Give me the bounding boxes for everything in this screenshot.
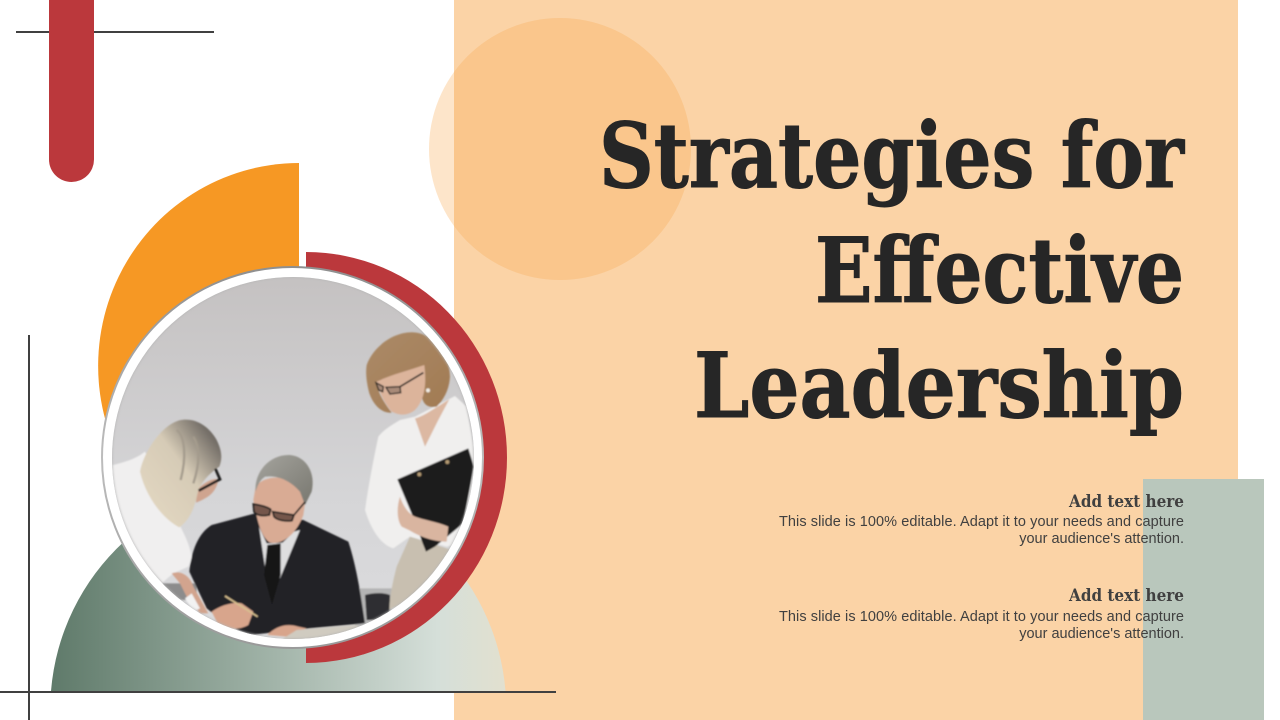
left woman's shirt xyxy=(103,452,192,585)
sage green rectangle xyxy=(1143,479,1264,720)
text block 1 xyxy=(779,492,1184,547)
text block 1: Add text here xyxy=(1068,492,1184,512)
man's glasses xyxy=(253,502,305,521)
text block 2: Add text here xyxy=(1068,586,1184,606)
left woman's hair xyxy=(140,420,221,527)
left woman's paper xyxy=(185,593,200,612)
right woman's earring xyxy=(426,388,430,392)
right woman's hand xyxy=(398,497,448,542)
red rounded bar xyxy=(49,0,94,182)
text block 2: your audience's attention. xyxy=(1019,626,1184,642)
man's hands and pen xyxy=(212,603,253,629)
text block 1: This slide is 100% editable. Adapt it to your needs and capture xyxy=(779,514,1184,530)
photo frame xyxy=(102,267,483,648)
thin line top left xyxy=(16,31,214,33)
thin vertical line xyxy=(28,335,30,720)
left woman's glasses xyxy=(199,469,220,491)
man's suit xyxy=(189,513,365,635)
right woman's face xyxy=(377,365,425,415)
photo inner shadow xyxy=(111,276,475,640)
man's shirt xyxy=(259,527,300,578)
translucent orange circle xyxy=(429,18,691,280)
man's hair xyxy=(256,455,313,505)
text block 2 xyxy=(779,586,1184,642)
orange semicircle xyxy=(98,163,299,490)
title xyxy=(599,103,1185,439)
title: Strategies for xyxy=(599,103,1185,209)
gradient green dome xyxy=(51,481,506,691)
man's tie xyxy=(264,543,281,605)
right woman's glasses xyxy=(376,373,423,394)
thin horizontal baseline xyxy=(0,691,556,693)
sofa and desk xyxy=(355,588,392,627)
left woman's face xyxy=(196,479,218,503)
peach background panel xyxy=(454,0,1238,720)
right woman's clipboard xyxy=(397,448,474,552)
right woman's skirt xyxy=(389,537,452,609)
text block 2: This slide is 100% editable. Adapt it to your needs and capture xyxy=(779,609,1184,625)
right woman's neck xyxy=(415,399,449,447)
title: Leadership xyxy=(694,333,1184,439)
text block 1: your audience's attention. xyxy=(1019,531,1184,547)
left woman's arm and hand xyxy=(172,572,208,613)
title: Effective xyxy=(815,218,1184,324)
red half ring xyxy=(306,252,507,663)
circular photo of three colleagues xyxy=(100,267,490,650)
laptop xyxy=(283,625,373,650)
man's face xyxy=(253,478,307,543)
right woman's shirt xyxy=(365,396,475,548)
right woman's hair xyxy=(366,332,450,413)
photo contents xyxy=(112,277,474,639)
